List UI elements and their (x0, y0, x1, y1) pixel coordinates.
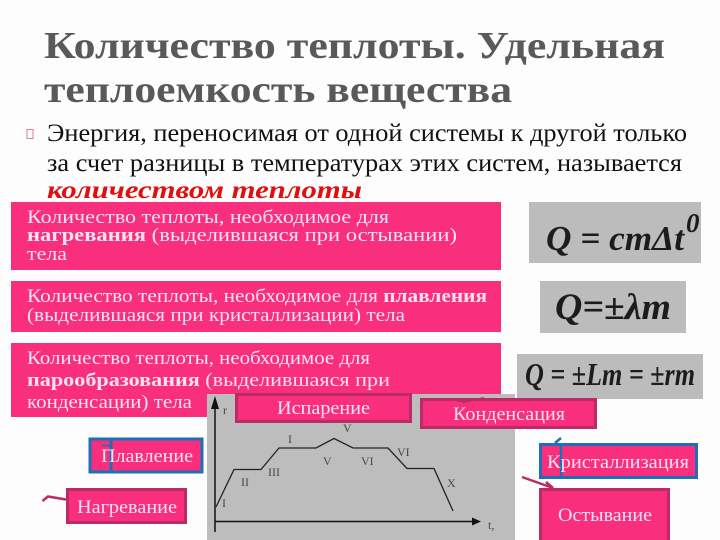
chart labels: III (268, 465, 280, 479)
panel: melting (11, 281, 501, 332)
panel: vaporization: Количество теплоты, необходимое для (27, 348, 370, 369)
panel: melting: (выделившаяся при кристаллизации) тела (27, 305, 406, 326)
label: melting (90, 439, 202, 472)
panel: vaporization: парообразования (выделившаяся при (27, 370, 390, 391)
panel: heating: тела (27, 244, 68, 265)
chart labels: t, (488, 518, 494, 532)
chart: temperature vs time (207, 394, 515, 540)
label: crystallization: Кристаллизация (547, 452, 689, 473)
chart labels: II (241, 475, 249, 489)
label: evaporation: Испарение (277, 398, 370, 419)
title: теплоемкость вещества (44, 69, 512, 111)
chart labels: r (223, 403, 227, 417)
label: heating (42, 490, 186, 522)
formula: melting (540, 281, 686, 333)
label: melting: Плавление (101, 446, 193, 467)
title: Количество теплоты. Удельная (44, 25, 665, 67)
panel: heating (11, 202, 501, 270)
panel: heating: Количество теплоты, необходимое для (27, 207, 389, 228)
label: heating: Нагревание (77, 497, 177, 518)
title (44, 25, 665, 111)
chart labels: I (222, 496, 226, 510)
panel: melting: Количество теплоты, необходимое для плавления (27, 286, 487, 307)
axes (215, 400, 476, 532)
axis arrows (211, 396, 481, 526)
curve (216, 438, 453, 511)
panel: vaporization: конденсации) тела (27, 392, 193, 413)
label: cooling: Остывание (558, 505, 652, 526)
intro text: количеством теплоты (47, 177, 362, 204)
panel: heating: нагревания (выделившаяся при остывании) (27, 225, 457, 246)
label: condensation: Конденсация (453, 404, 565, 425)
intro text: Энергия, переносимая от одной системы к другой только (47, 120, 687, 147)
formula: melting: Q=±λm (555, 287, 671, 328)
chart labels: X (447, 476, 456, 490)
label: evaporation (236, 394, 410, 422)
formula: heating (529, 202, 701, 263)
formula: heating: 0 (686, 208, 700, 238)
formula: heating: Q = cmΔt (546, 219, 685, 258)
label: cooling (522, 477, 668, 540)
chart labels: I (288, 432, 292, 446)
label: condensation (422, 398, 596, 428)
label: crystallization (540, 438, 696, 478)
chart labels: VI (397, 445, 410, 459)
chart labels: V (323, 454, 332, 468)
intro text: за счет разницы в температурах этих систем, называется (47, 150, 683, 177)
chart labels: VI (361, 454, 374, 468)
chart labels (222, 403, 494, 532)
chart labels: V (343, 421, 352, 435)
bullet icon (27, 130, 33, 138)
panel: vaporization (11, 343, 501, 417)
intro text (47, 120, 687, 204)
